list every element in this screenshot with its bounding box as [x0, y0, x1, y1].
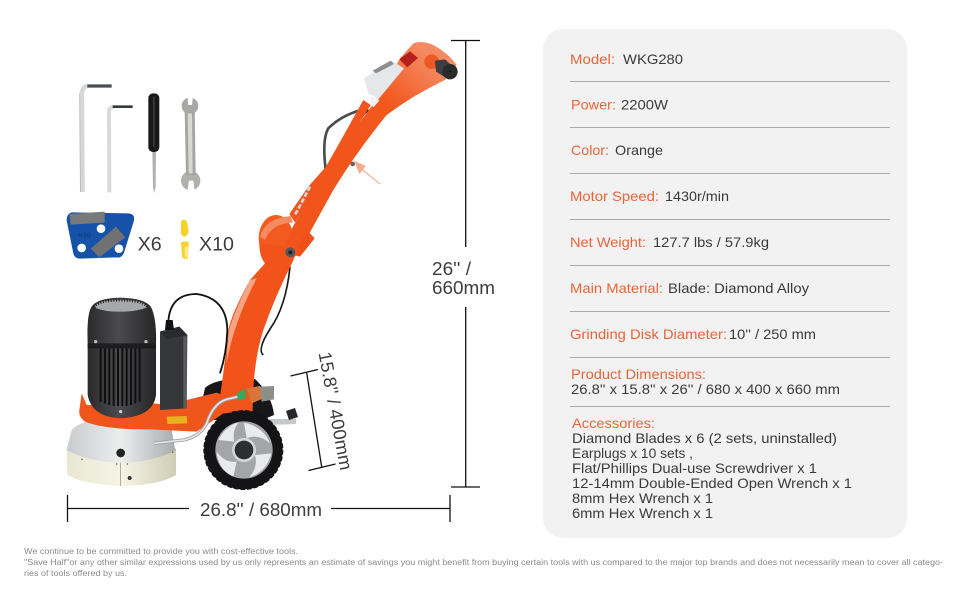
icon: small hex wrench	[109, 107, 133, 192]
main arm	[283, 42, 457, 258]
motor	[87, 298, 156, 418]
spec: model: WKG280	[623, 51, 683, 67]
icon: earplugs	[181, 220, 189, 259]
icon: open wrench	[181, 96, 200, 192]
dimension: width 15.8 inch	[290, 350, 356, 472]
panel: specifications	[543, 29, 907, 538]
text: width label: 15.8'' / 400mm	[315, 350, 356, 472]
spec: main material	[570, 280, 809, 296]
grinding head	[67, 417, 176, 486]
spec: color	[571, 142, 663, 158]
text: X6: X6	[138, 233, 162, 255]
spec: main material: Blade: Diamond Alloy	[668, 280, 809, 296]
spec: motor speed: Motor Speed:	[570, 188, 659, 204]
spec: accessories: 8mm Hex Wrench x 1	[572, 490, 713, 506]
spec: net weight	[570, 234, 769, 250]
zip tie	[350, 161, 380, 184]
chrome fittings	[295, 187, 310, 215]
spec: accessories: Diamond Blades x 6 (2 sets, uninstalled)	[572, 430, 837, 446]
pivot disc	[259, 215, 293, 262]
dimension: height 26 inch	[432, 40, 495, 487]
spec: grinding disk diameter	[570, 326, 816, 342]
machine: floor grinder	[67, 42, 458, 489]
spec: accessories: 6mm Hex Wrench x 1	[572, 505, 713, 521]
rating plate	[167, 416, 187, 424]
spec: net weight: 127.7 lbs / 57.9kg	[653, 234, 769, 250]
spec: power: 2200W	[621, 96, 669, 112]
spec: net weight: Net Weight:	[570, 234, 646, 250]
spec: model: Model:	[570, 51, 615, 67]
accessory tools	[67, 86, 234, 259]
motor cable	[168, 294, 227, 373]
cooling hose	[154, 395, 245, 443]
base assembly	[67, 294, 283, 489]
spec: power	[571, 96, 669, 112]
back rail	[289, 100, 371, 223]
footnote: "Save Half"or any other similar expressions used by us only represents an estimate of savings you might benefit from buying certain tools with us compared to the major top brands and does not necessarily mean to cover all catego-	[24, 557, 943, 567]
spec: power: Power:	[571, 96, 616, 112]
arm bracket	[293, 231, 315, 257]
handle and upper arm	[220, 42, 458, 412]
spec: accessories: 12-14mm Double-Ended Open Wrench x 1	[572, 475, 852, 491]
icon: screwdriver	[148, 93, 159, 193]
dimension: length 26.8 inch	[68, 495, 450, 522]
hose valve	[237, 386, 274, 403]
cable: lower arm	[261, 267, 290, 355]
spec: model	[570, 51, 683, 67]
footnote: ries of tools offered by us.	[24, 568, 127, 578]
spec: product dimensions	[571, 366, 840, 397]
spec: accessories: Earplugs x 10 sets ,	[572, 445, 693, 461]
front wheel	[204, 411, 283, 489]
footnote	[24, 546, 943, 578]
icon: diamond blade: #30	[78, 230, 91, 239]
spec: accessories	[572, 415, 852, 521]
red opening	[399, 51, 418, 67]
text: height label: 26'' /	[432, 259, 471, 279]
switch box	[364, 61, 404, 107]
pivot bolt	[285, 247, 295, 257]
spec: product dimensions: 26.8'' x 15.8'' x 26'' / 680 x 400 x 660 mm	[571, 381, 840, 397]
spec: product dimensions: Product Dimensions:	[571, 366, 706, 382]
spec: color: Color:	[571, 142, 609, 158]
dimension: height 26 inch: 660mm	[432, 278, 495, 298]
icon: large hex wrench	[80, 86, 112, 192]
text: X10: X10	[199, 233, 234, 255]
spec: main material: Main Material:	[570, 280, 663, 296]
text: length label: 26.8'' / 680mm	[200, 500, 322, 520]
base plate	[79, 393, 252, 432]
icon: diamond blade	[67, 212, 134, 259]
spec: grinding disk diameter: Grinding Disk Diameter:	[570, 326, 727, 342]
footnote: We continue to be committed to provide you with cost-effective tools.	[24, 546, 298, 556]
control box	[160, 320, 187, 410]
spec: grinding disk diameter: 10'' / 250 mm	[729, 326, 816, 342]
grip	[424, 54, 458, 79]
rear wheel	[203, 379, 274, 420]
lower arm	[220, 243, 298, 412]
spec: motor speed: 1430r/min	[665, 188, 729, 204]
spec: color: Orange	[615, 142, 663, 158]
cables	[324, 108, 368, 172]
spec: motor speed	[570, 188, 729, 204]
rear stand	[263, 408, 298, 425]
spec: accessories: Flat/Phillips Dual-use Screwdriver x 1	[572, 460, 817, 476]
spec: accessories: Accessories:	[572, 415, 655, 431]
